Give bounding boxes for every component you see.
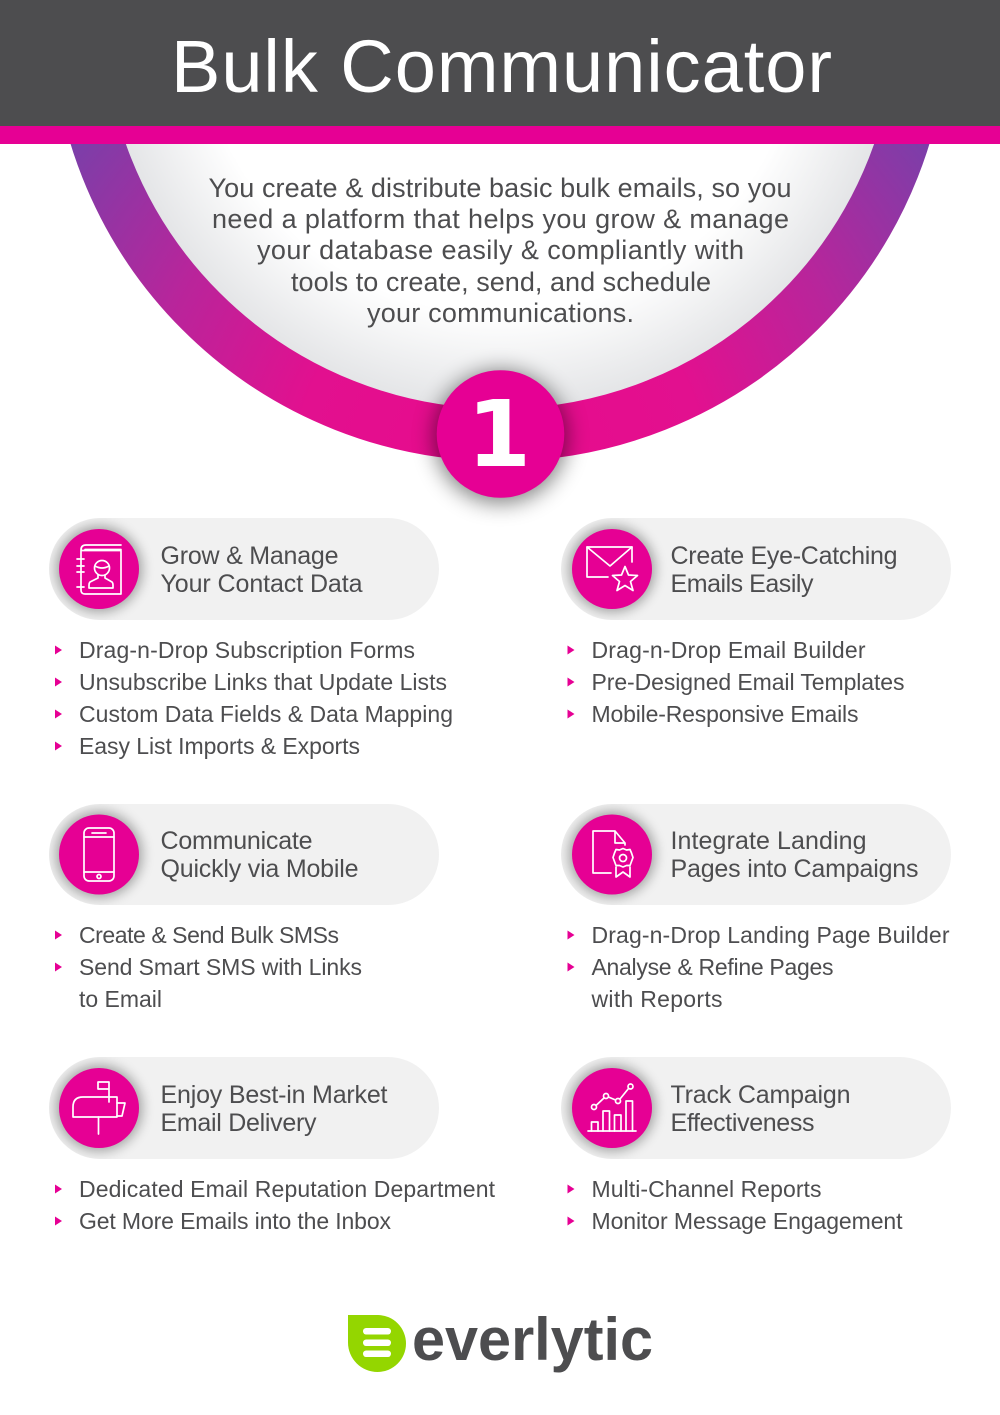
bullet list: delivery bbox=[55, 1176, 496, 1234]
bullet list: tracking: Multi-Channel Reports bbox=[592, 1176, 822, 1202]
intro text: You create & distribute basic bulk emails, so you bbox=[208, 173, 792, 203]
heading pill: tracking bbox=[561, 1057, 951, 1159]
heading pill: create emails: Emails Easily bbox=[670, 570, 814, 598]
number badge bbox=[434, 370, 566, 503]
heading pill: grow and manage: Your Contact Data bbox=[160, 570, 363, 598]
bullet list: landing pages: Analyse & Refine Pages bbox=[592, 954, 834, 980]
icon: chart bbox=[588, 1084, 636, 1131]
icon: mobile phone bbox=[84, 828, 114, 881]
heading pill: create emails bbox=[561, 518, 951, 620]
bullet list: create emails: Pre-Designed Email Templates bbox=[592, 669, 904, 695]
intro text: need a platform that helps you grow & manage bbox=[212, 204, 789, 234]
icon: contact book bbox=[77, 545, 121, 594]
heading pill: landing pages: Integrate Landing bbox=[670, 827, 866, 855]
intro text bbox=[208, 173, 792, 328]
heading pill: delivery: Enjoy Best-in Market bbox=[160, 1081, 388, 1109]
heading pill: landing pages: Pages into Campaigns bbox=[670, 855, 918, 883]
heading pill: mobile: Quickly via Mobile bbox=[160, 855, 358, 883]
everlytic logo: everlytic bbox=[412, 1306, 653, 1373]
number badge: 1 bbox=[467, 381, 531, 488]
icon: mailbox bbox=[73, 1082, 125, 1134]
intro text: your database easily & compliantly with bbox=[257, 235, 744, 265]
header banner bbox=[0, 0, 1000, 144]
bullet list: landing pages bbox=[568, 922, 950, 1012]
bullet list: mobile: to Email bbox=[79, 986, 162, 1012]
panel: delivery bbox=[49, 1057, 496, 1234]
bullet list: delivery: Dedicated Email Reputation Department bbox=[79, 1176, 496, 1202]
bullet list: landing pages: with Reports bbox=[590, 986, 722, 1012]
bullet list: tracking: Monitor Message Engagement bbox=[592, 1208, 903, 1234]
heading pill: tracking: Track Campaign bbox=[670, 1081, 850, 1109]
intro text: tools to create, send, and schedule bbox=[291, 267, 711, 297]
intro text: your communications. bbox=[367, 298, 634, 328]
panel: landing pages bbox=[561, 804, 951, 1012]
bullet list: mobile: Send Smart SMS with Links bbox=[79, 954, 362, 980]
heading pill: grow and manage bbox=[49, 518, 439, 620]
icon: document with rosette bbox=[593, 831, 633, 877]
bullet list: grow and manage: Custom Data Fields & Data Mapping bbox=[79, 701, 453, 727]
bullet list: grow and manage bbox=[55, 637, 453, 759]
bullet list: create emails bbox=[568, 637, 904, 727]
icon: logo mark bbox=[348, 1315, 406, 1372]
bullet list: mobile: Create & Send Bulk SMSs bbox=[79, 922, 339, 948]
bullet list: mobile bbox=[55, 922, 362, 1012]
heading pill: delivery: Email Delivery bbox=[160, 1109, 317, 1137]
panel: grow and manage bbox=[49, 518, 453, 759]
bullet list: create emails: Drag-n-Drop Email Builder bbox=[592, 637, 866, 663]
bullet list: grow and manage: Easy List Imports & Exports bbox=[79, 733, 360, 759]
panel: mobile bbox=[49, 804, 439, 1012]
bullet list: grow and manage: Drag-n-Drop Subscription Forms bbox=[79, 637, 415, 663]
bullet list: landing pages: Drag-n-Drop Landing Page Builder bbox=[592, 922, 950, 948]
heading pill: create emails: Create Eye-Catching bbox=[670, 542, 898, 570]
bullet list: create emails: Mobile-Responsive Emails bbox=[592, 701, 858, 727]
panel: tracking bbox=[561, 1057, 951, 1234]
heading pill: landing pages bbox=[561, 804, 951, 905]
heading pill: mobile: Communicate bbox=[160, 827, 312, 855]
icon: envelope with star bbox=[587, 547, 638, 590]
title: Bulk Communicator bbox=[171, 25, 832, 108]
bullet list: delivery: Get More Emails into the Inbox bbox=[79, 1208, 392, 1234]
bullet list: grow and manage: Unsubscribe Links that Update Lists bbox=[79, 669, 447, 695]
bullet list: tracking bbox=[568, 1176, 903, 1234]
gradient ring with inner disc bbox=[77, 0, 923, 435]
heading pill: tracking: Effectiveness bbox=[670, 1109, 814, 1137]
heading pill: grow and manage: Grow & Manage bbox=[160, 542, 338, 570]
panel: create emails bbox=[561, 518, 951, 727]
heading pill: delivery bbox=[49, 1057, 439, 1159]
heading pill: mobile bbox=[49, 804, 439, 905]
